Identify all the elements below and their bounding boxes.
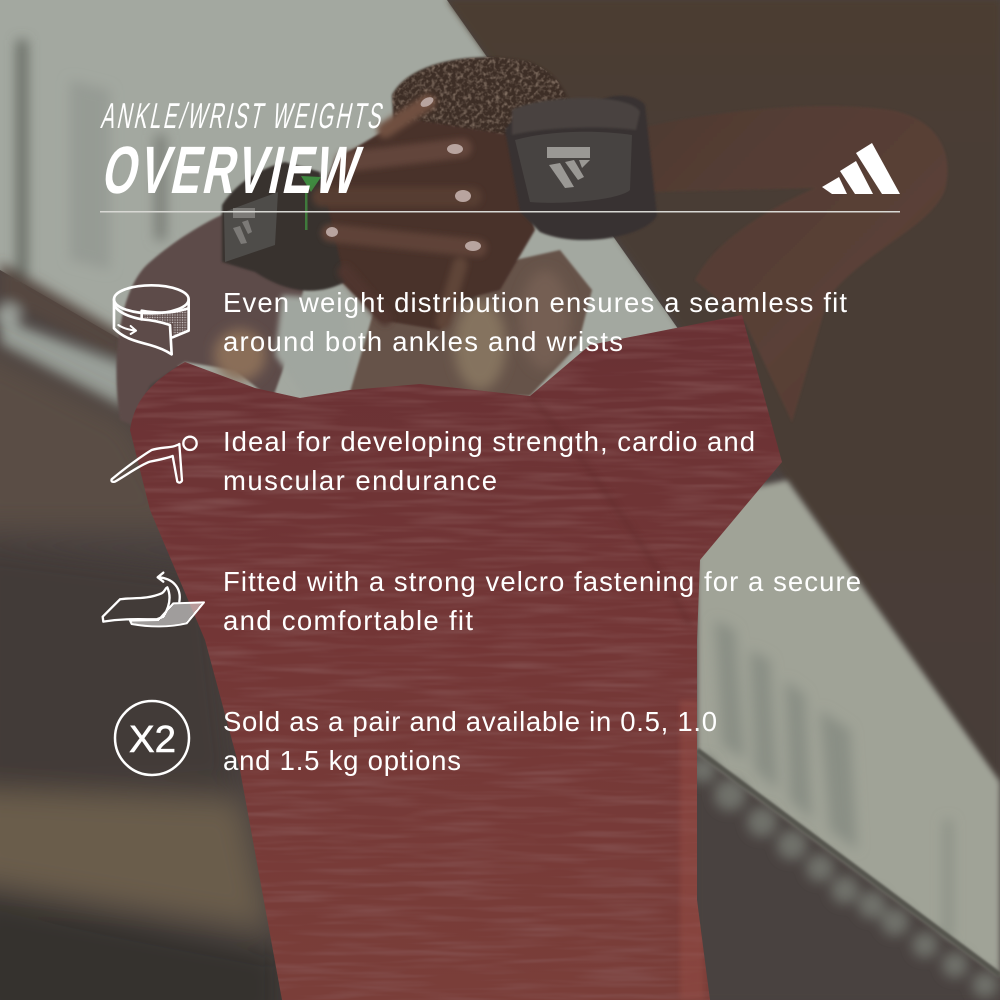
bokeh railing (690, 757, 998, 998)
neck (350, 250, 592, 396)
text: fit: around both ankles and wrists (223, 326, 623, 357)
icon: x2 circle: X2 (129, 719, 176, 761)
finger nails (326, 95, 481, 251)
text: fit: Even weight distribution ensures a seamless fit (223, 287, 847, 318)
text: velcro: Fitted with a strong velcro fastening for a secure (223, 566, 861, 597)
right arm (640, 106, 948, 422)
text: training: Ideal for developing strength, cardio and (223, 426, 755, 457)
logo: three bars (822, 143, 900, 194)
gap behind neck (275, 295, 355, 398)
icon: plank figure (111, 437, 197, 483)
text: pair options: and 1.5 kg options (223, 745, 461, 776)
left wristband (222, 162, 345, 291)
text: pair options: Sold as a pair and available in 0.5, 1.0 (223, 706, 717, 737)
lower right dark floor (697, 757, 1000, 1000)
shirt (130, 315, 782, 1000)
beam shadows (715, 620, 952, 940)
icon: velcro fastening (103, 573, 204, 626)
heading: title: OVERVIEW (97, 134, 367, 208)
header divider (100, 211, 900, 212)
icon: weight band (114, 285, 189, 354)
light wall upper left (0, 0, 700, 430)
hands (320, 120, 535, 330)
heading: subtitle: ANKLE/WRIST WEIGHTS (98, 96, 387, 136)
light beam lower right (697, 480, 1000, 977)
icon: x2 circle (115, 701, 189, 775)
back of head (385, 250, 475, 300)
neck highlight (454, 300, 506, 390)
left arm (117, 212, 310, 425)
fingers (322, 102, 478, 322)
right wristband (505, 96, 657, 240)
shirt highlights (530, 396, 704, 1000)
hair (392, 57, 573, 150)
left arm highlight (214, 329, 266, 381)
dark ceiling upper right (447, 0, 1000, 782)
left side structure (0, 40, 166, 410)
text: velcro: and comfortable fit (223, 605, 473, 636)
text: training: muscular endurance (223, 465, 497, 496)
wristband logos (233, 147, 590, 244)
athlete figure (117, 50, 948, 1000)
